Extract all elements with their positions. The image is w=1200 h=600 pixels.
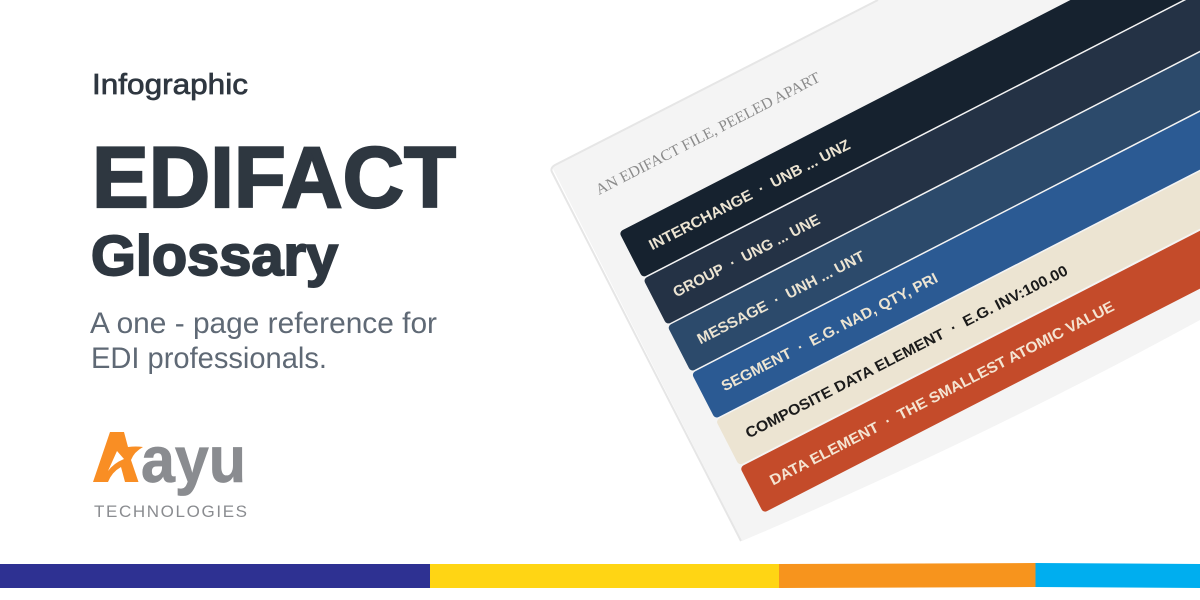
bar: composite data element: COMPOSITE DATA ELEMENT · E.G. INV:100.00	[743, 262, 1071, 442]
description text	[90, 307, 437, 375]
logo wordmark: ayu: ayu	[141, 423, 246, 496]
description text: A one - page reference for	[90, 307, 437, 340]
description text: EDI professionals.	[91, 342, 327, 375]
colour strip	[0, 563, 1200, 588]
layered bars	[593, 0, 1200, 513]
card edge	[551, 0, 878, 541]
bar: group: GROUP · UNG ... UNE	[670, 211, 823, 301]
bar: segment: SEGMENT · E.G. NAD, QTY, PRI	[719, 270, 941, 395]
logo tagline: Technologies: TECHNOLOGIES	[94, 502, 247, 521]
icon: orange A mark	[93, 432, 143, 482]
title: EDIFACT: EDIFACT	[92, 130, 456, 226]
logo: Aayu Technologies	[93, 423, 247, 521]
bar: data element: DATA ELEMENT · THE SMALLEST ATOMIC VALUE	[767, 298, 1117, 489]
panel: peeled EDIFACT card	[551, 0, 1200, 541]
bar: interchange: INTERCHANGE · UNB ... UNZ	[646, 136, 853, 254]
subtitle: Glossary: Glossary	[91, 224, 338, 288]
eyebrow: Infographic: Infographic	[92, 69, 248, 101]
bar: message: MESSAGE · UNH ... UNT	[694, 248, 868, 348]
caption: AN EDIFACT FILE, PEELED APART	[593, 69, 824, 199]
card background	[552, 0, 1200, 541]
